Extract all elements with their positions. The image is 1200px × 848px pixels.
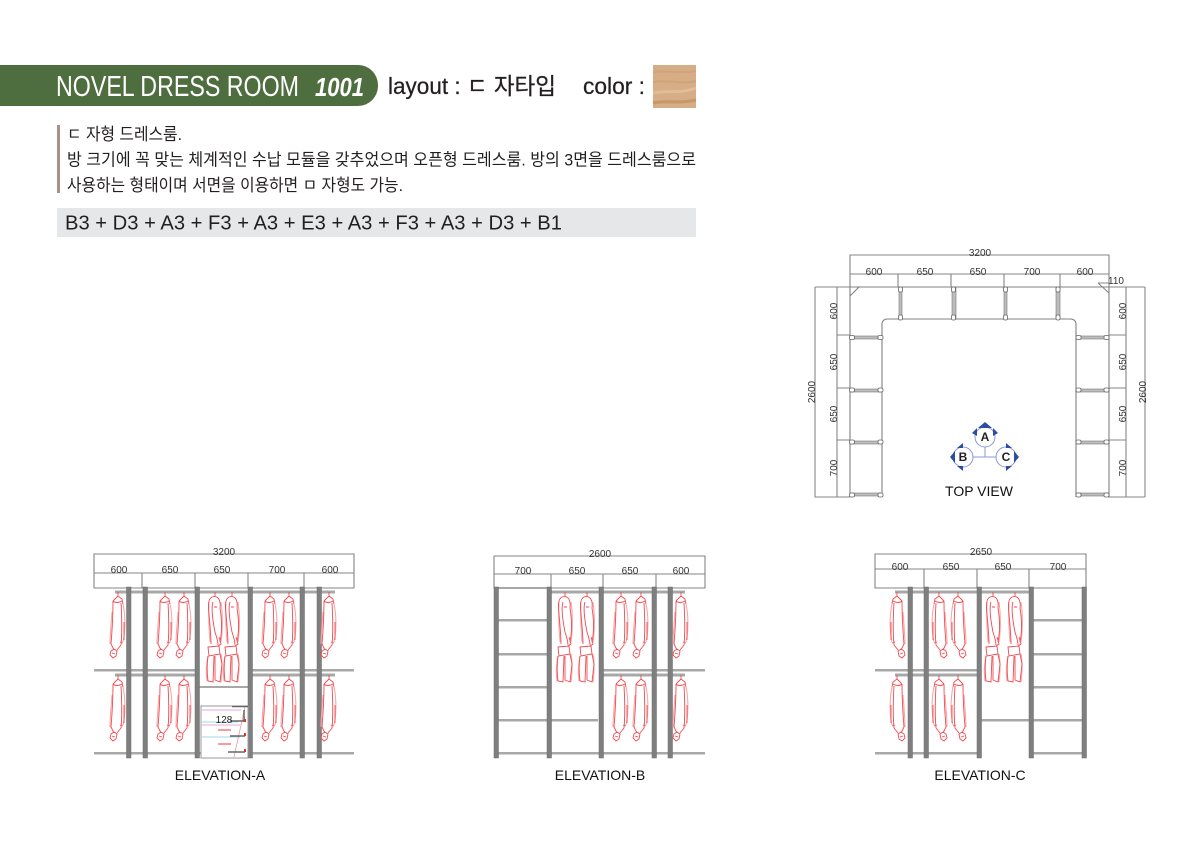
top view dimensions: 650	[917, 267, 934, 278]
dimension frame C: 700	[1050, 562, 1067, 573]
top view dimensions: 2600	[807, 380, 818, 403]
dimension frame A: 600	[111, 565, 128, 576]
top view dimensions	[807, 248, 1149, 497]
posts C	[908, 587, 1086, 758]
dimension frame C: 650	[943, 562, 960, 573]
posts A	[126, 587, 322, 758]
dimension frame A: 650	[214, 565, 231, 576]
top view dimensions: 650	[1118, 405, 1129, 422]
top view dimensions: 2600	[1138, 380, 1149, 403]
dimension frame A: 600	[322, 565, 339, 576]
elevation A label: ELEVATION-A	[175, 767, 266, 783]
hanging clothes C	[890, 592, 1022, 741]
dimension frame A: 650	[162, 565, 179, 576]
elevation A	[94, 547, 354, 783]
description line 3: 사용하는 형태이며 서면을 이용하면 ㅁ 자형도 가능.	[67, 176, 403, 195]
description line 1: ㄷ 자형 드레스룸.	[67, 125, 182, 144]
rails and shelves A	[94, 590, 354, 754]
shelf partitions	[851, 288, 1108, 496]
elevation B label: ELEVATION-B	[555, 767, 645, 783]
rails and shelves C	[875, 590, 1084, 754]
top view dimensions: 700	[1118, 459, 1129, 476]
rails and shelves B	[498, 587, 705, 754]
dimension frame C: 2650	[970, 547, 993, 558]
shelf post caps	[850, 287, 1109, 497]
dimension frame B: 700	[515, 566, 532, 577]
view direction compass: B	[959, 450, 968, 464]
dimension frame B: 600	[673, 566, 690, 577]
module formula bar	[57, 208, 696, 237]
top view dimensions: 110	[1108, 276, 1124, 287]
module formula text: B3 + D3 + A3 + F3 + A3 + E3 + A3 + F3 + A3 + D3 + B1	[65, 212, 562, 234]
elevation C label: ELEVATION-C	[934, 767, 1026, 783]
elevation B	[494, 549, 705, 783]
room outline	[850, 287, 1109, 497]
model number: 1001	[315, 72, 364, 102]
top view plan	[807, 248, 1149, 499]
dimension frame C	[875, 547, 1086, 588]
top view dimensions: 600	[829, 302, 840, 319]
top view dimensions: 650	[970, 267, 987, 278]
view direction compass: A	[981, 430, 990, 444]
top view dimensions: 600	[866, 267, 883, 278]
top view label: TOP VIEW	[945, 483, 1014, 499]
top view dimensions: 700	[1024, 267, 1041, 278]
top view dimensions: 650	[1118, 353, 1129, 370]
elevation C	[875, 547, 1086, 783]
view direction compass	[950, 422, 1019, 471]
color swatch: wood	[653, 65, 696, 108]
dimension frame B	[494, 549, 705, 588]
title text: NOVEL DRESS ROOM	[56, 71, 299, 103]
view direction compass: C	[1002, 450, 1011, 464]
dimension frame B: 2600	[589, 549, 612, 560]
top view dimensions: 3200	[969, 248, 992, 259]
dimension frame C: 600	[892, 562, 909, 573]
dimension frame A: 3200	[213, 547, 236, 558]
dimension frame A	[94, 547, 354, 588]
description line 2: 방 크기에 꼭 맞는 체계적인 수납 모듈을 갖추었으며 오픈형 드레스룸. 방의 3면을 드레스룸으로	[67, 150, 696, 170]
top view dimensions: 700	[829, 459, 840, 476]
drawer unit: 128	[216, 715, 233, 726]
posts B	[494, 587, 672, 758]
dimension frame B: 650	[622, 566, 639, 577]
drawer unit	[201, 706, 248, 758]
hanging clothes A	[110, 592, 336, 741]
top view dimensions: 600	[1077, 267, 1094, 278]
top view dimensions: 650	[829, 405, 840, 422]
hanging clothes B	[556, 592, 688, 741]
top view dimensions: 650	[829, 353, 840, 370]
title banner	[0, 65, 378, 106]
color label: color :	[583, 73, 645, 99]
dimension frame A: 700	[269, 565, 286, 576]
dimension frame C: 650	[995, 562, 1012, 573]
dimension frame B: 650	[569, 566, 586, 577]
description block	[57, 125, 696, 195]
top view dimensions: 600	[1118, 302, 1129, 319]
layout label: layout : ㄷ 자타입	[388, 73, 556, 99]
